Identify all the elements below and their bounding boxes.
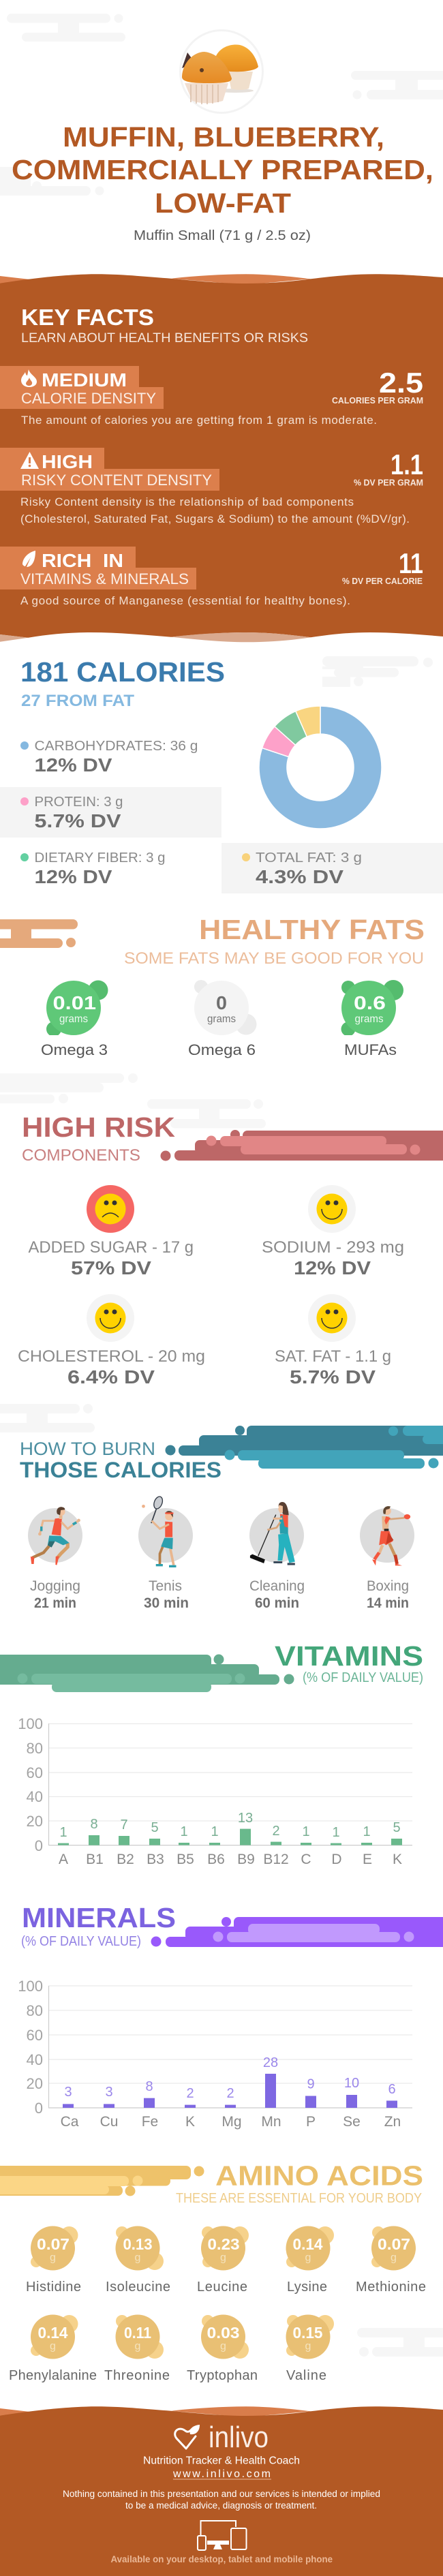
bar chart: vitamins: 0 (35, 1837, 43, 1854)
amino: valine: g (305, 2340, 311, 2352)
bar chart: vitamins: A (59, 1852, 68, 1867)
bar chart: minerals: 40 (27, 2051, 43, 2068)
icon: devices (198, 2521, 247, 2550)
amino: threonine: Threonine (104, 2368, 170, 2383)
risk item: sodium (262, 1185, 404, 1278)
amino: methionine: 0.07 (378, 2235, 410, 2253)
icon: tennis player (142, 1495, 176, 1567)
banner: healthy fats (0, 919, 78, 948)
exercise: tennis (138, 1495, 193, 1611)
bar chart: minerals: Mn (261, 2114, 281, 2130)
amino: methionine: Methionine (356, 2280, 426, 2295)
bar chart: vitamins: 5 (393, 1820, 401, 1835)
heading: minerals (21, 1902, 176, 1949)
risk item: saturated fat: 5.7% DV (290, 1366, 376, 1387)
bar chart: vitamins: B6 (207, 1852, 225, 1867)
stat: omega 3 (41, 980, 108, 1058)
amino: leucine: g (220, 2252, 226, 2264)
fact: risky content density: % DV PER GRAM (354, 477, 423, 488)
panel: key facts (0, 274, 443, 642)
fact: rich in vitamins and minerals: % DV PER CALORIE (342, 576, 423, 586)
bar chart: minerals: 10 (344, 2076, 359, 2091)
amino: phenylalanine: g (50, 2340, 56, 2352)
amino: leucine: 0.23 (207, 2235, 240, 2253)
fact: rich in vitamins and minerals: A good source of Manganese (essential for healthy bones). (20, 594, 350, 607)
fact: calorie density: CALORIE DENSITY (21, 390, 156, 407)
bar chart: vitamins: E (363, 1852, 372, 1867)
amino: isoleucine: 0.13 (123, 2235, 153, 2253)
bar chart: minerals: 20 (27, 2075, 43, 2092)
logo: inlivo (175, 2421, 269, 2454)
bar chart: vitamins: 100 (18, 1715, 43, 1732)
bar chart: minerals: Se (343, 2114, 361, 2130)
risk item: saturated fat: SAT. FAT - 1.1 g (275, 1347, 391, 1366)
amino: lysine: g (305, 2252, 311, 2264)
fact: calorie density: MEDIUM (42, 369, 127, 390)
amino: tryptophan: g (220, 2340, 226, 2352)
availability note: Available on your desktop, tablet and mobile phone (110, 2554, 333, 2564)
amino: leucine: Leucine (197, 2280, 247, 2295)
bar chart: minerals: 28 (263, 2055, 278, 2070)
legend: total fat: TOTAL FAT: 3 g (256, 850, 362, 865)
amino: histidine: 0.07 (37, 2235, 70, 2253)
stat: MUFAs: MUFAs (344, 1041, 397, 1058)
legend: protein: 5.7% DV (34, 810, 121, 831)
amino: threonine: 0.11 (124, 2324, 151, 2342)
legend: protein (0, 787, 222, 838)
heading: amino acids (176, 2160, 423, 2206)
fact: rich in vitamins and minerals: RICH IN (42, 550, 123, 571)
stat: omega 3: grams (59, 1013, 88, 1025)
exercise: boxing: 14 min (367, 1595, 409, 1611)
heading: high risk: HIGH RISK (22, 1111, 175, 1143)
banner: minerals (151, 1917, 443, 1947)
icon: warning triangle (20, 452, 39, 469)
bar chart: vitamins: 20 (27, 1813, 43, 1830)
amino: histidine (26, 2226, 81, 2295)
subheading: calories from fat: 27 FROM FAT (21, 692, 134, 710)
bar chart: minerals: 60 (27, 2027, 43, 2044)
amino: lysine: Lysine (287, 2280, 327, 2295)
bar chart: vitamins: 1 (59, 1825, 67, 1840)
amino: phenylalanine (9, 2314, 97, 2383)
amino: histidine: g (50, 2252, 56, 2264)
subheading: components: COMPONENTS (22, 1146, 140, 1165)
fact: rich in vitamins and minerals: VITAMINS & MINERALS (20, 570, 189, 587)
legend: carbohydrates: CARBOHYDRATES: 36 g (34, 739, 198, 754)
amino: tryptophan: 0.03 (207, 2324, 240, 2342)
exercise: tennis: 30 min (144, 1595, 189, 1611)
risk item: added sugar: 57% DV (71, 1257, 151, 1278)
bar chart: vitamins: K (393, 1852, 402, 1867)
bar chart: vitamins: 1 (211, 1824, 219, 1839)
amino: valine (286, 2314, 334, 2383)
heading: key facts: KEY FACTS (21, 305, 154, 330)
bar chart: vitamins: 1 (332, 1825, 340, 1840)
legend: carbohydrates (20, 739, 198, 776)
exercise: cleaning: 60 min (255, 1595, 299, 1611)
amino: isoleucine (106, 2226, 170, 2295)
bar chart: vitamins: 8 (90, 1817, 98, 1832)
exercise: boxing (360, 1506, 414, 1611)
amino: valine: Valine (286, 2368, 326, 2383)
risk item: added sugar: ADDED SUGAR - 17 g (29, 1238, 194, 1257)
heading: how to burn those calories: THOSE CALORIES (20, 1458, 222, 1482)
amino: tryptophan: Tryptophan (187, 2368, 258, 2383)
website link: www.inlivo.com (172, 2468, 271, 2480)
banner: vitamins (0, 1655, 294, 1692)
banner: high risk (161, 1130, 443, 1161)
disclaimer (63, 2489, 380, 2511)
logo: inlivo: inlivo (209, 2421, 269, 2454)
stat: MUFAs: 0.6 (354, 992, 386, 1013)
serving size subtitle: Muffin Small (71 g / 2.5 oz) (134, 228, 311, 243)
exercise: boxing: Boxing (367, 1578, 409, 1594)
fact: rich in vitamins and minerals: 11 (399, 547, 423, 579)
stat: omega 6: 0 (216, 992, 227, 1013)
fact: calorie density (0, 366, 423, 427)
subheading: (% OF DAILY VALUE) (21, 1934, 141, 1949)
bar chart: vitamins: 1 (180, 1824, 188, 1839)
bar chart: vitamins: 60 (27, 1764, 43, 1781)
donut chart: macronutrients (259, 706, 382, 829)
heading: minerals: MINERALS (22, 1902, 176, 1933)
fact: calorie density: 2.5 (379, 367, 423, 399)
bar chart: minerals (18, 1978, 412, 2130)
fact: rich in vitamins and minerals (0, 547, 423, 607)
legend: dietary fiber: 12% DV (34, 866, 112, 887)
bar chart: minerals: 9 (307, 2077, 315, 2092)
bar chart: vitamins: B5 (177, 1852, 194, 1867)
subheading: SOME FATS MAY BE GOOD FOR YOU (124, 949, 424, 968)
panel: footer (0, 2406, 443, 2576)
legend: total fat: 4.3% DV (256, 866, 343, 887)
bar chart: vitamins: 80 (27, 1740, 43, 1757)
bar chart: vitamins: B12 (263, 1852, 289, 1867)
heading: healthy fats (124, 914, 425, 968)
amino: threonine: g (135, 2340, 140, 2352)
bar chart: minerals: 100 (18, 1978, 43, 1995)
fact: risky content density: Risky Content density is the relationship of bad components (20, 495, 354, 508)
bar chart: vitamins: 13 (238, 1811, 253, 1826)
bar chart: vitamins: 7 (120, 1818, 128, 1833)
banner: amino acids (0, 2166, 204, 2196)
icon: boxer (372, 1506, 410, 1565)
bar chart: minerals: 3 (64, 2085, 72, 2100)
exercise: jogging (28, 1507, 82, 1611)
bar chart: vitamins: B1 (86, 1852, 104, 1867)
legend: total fat (222, 843, 443, 893)
banner: burn calories (165, 1426, 443, 1469)
risk item: sodium: 12% DV (294, 1257, 371, 1278)
fact: calorie density: CALORIES PER GRAM (332, 395, 423, 405)
heading: calories: 181 CALORIES (20, 656, 225, 688)
fact: risky content density: RISKY CONTENT DENSITY (21, 472, 212, 489)
heading: how to burn those calories: HOW TO BURN (20, 1439, 155, 1459)
risk item: added sugar (29, 1185, 194, 1278)
icon: muffins photo (180, 30, 263, 113)
bar chart: minerals: Ca (61, 2114, 79, 2130)
risk item: cholesterol: CHOLESTEROL - 20 mg (18, 1347, 205, 1366)
bar chart: minerals: 0 (35, 2100, 43, 2117)
heading: calories (20, 656, 225, 710)
title: LOW-FAT (155, 187, 291, 219)
bar chart: vitamins: B3 (147, 1852, 164, 1867)
fact: risky content density (0, 448, 423, 525)
bar chart: vitamins: C (301, 1852, 311, 1867)
stat: omega 3: Omega 3 (41, 1041, 108, 1058)
heading: healthy fats: HEALTHY FATS (199, 914, 425, 945)
bar chart: vitamins (18, 1715, 412, 1867)
bar chart: vitamins: 1 (302, 1824, 310, 1839)
title: COMMERCIALLY PREPARED, (12, 154, 433, 185)
risk item: sodium: SODIUM - 293 mg (262, 1238, 404, 1257)
amino: leucine (197, 2226, 249, 2295)
amino: histidine: Histidine (26, 2280, 81, 2295)
bar chart: minerals: 6 (388, 2082, 396, 2097)
stat: omega 6: Omega 6 (188, 1041, 256, 1058)
stat: omega 6: grams (207, 1013, 236, 1025)
heading: how to burn those calories (20, 1439, 222, 1482)
bar chart: vitamins: 1 (363, 1824, 371, 1839)
legend: dietary fiber (20, 850, 165, 887)
amino: phenylalanine: Phenylalanine (9, 2368, 97, 2383)
risk item: saturated fat (275, 1294, 391, 1387)
bar chart: minerals: 2 (186, 2086, 194, 2101)
amino: isoleucine: g (135, 2252, 140, 2264)
amino: isoleucine: Isoleucine (106, 2280, 170, 2295)
amino: phenylalanine: 0.14 (38, 2324, 68, 2342)
bar chart: minerals: Fe (142, 2114, 158, 2130)
bar chart: vitamins: 2 (272, 1824, 280, 1839)
stat: omega 3: 0.01 (53, 992, 96, 1013)
legend: protein: PROTEIN: 3 g (34, 795, 123, 810)
amino: lysine (286, 2226, 334, 2295)
bar chart: minerals: 80 (27, 2002, 43, 2019)
heading: vitamins (275, 1640, 423, 1685)
bar chart: vitamins: D (331, 1852, 342, 1867)
exercise: jogging: 21 min (34, 1595, 76, 1611)
bar chart: minerals: 3 (105, 2085, 113, 2100)
tagline: Nutrition Tracker & Health Coach (143, 2455, 300, 2467)
bar chart: vitamins: B2 (117, 1852, 134, 1867)
exercise: cleaning (249, 1502, 305, 1611)
amino: lysine: 0.14 (293, 2235, 323, 2253)
icon: leaf (22, 551, 35, 567)
subheading: (% OF DAILY VALUE) (303, 1670, 423, 1685)
risk item: cholesterol (18, 1294, 205, 1387)
bar chart: minerals: P (306, 2114, 316, 2130)
stat: omega 6 (188, 980, 256, 1058)
icon: woman sweeping (250, 1502, 295, 1565)
subheading: LEARN ABOUT HEALTH BENEFITS OR RISKS (21, 331, 308, 346)
legend: carbohydrates: 12% DV (34, 754, 112, 776)
amino: threonine (104, 2314, 170, 2383)
fact: risky content density: 1.1 (391, 448, 423, 480)
disclaimer: Nothing contained in this presentation and our services is intended or implied (63, 2489, 380, 2499)
icon: runner (31, 1507, 80, 1565)
icon: flame (21, 369, 37, 387)
fact: risky content density: (Cholesterol, Saturated Fat, Sugars & Sodium) to the amount (%DV/gr). (20, 512, 410, 525)
amino: methionine (356, 2226, 426, 2295)
exercise: cleaning: Cleaning (249, 1578, 305, 1594)
title (12, 121, 433, 219)
title: MUFFIN, BLUEBERRY, (63, 121, 384, 153)
bar chart: minerals: 2 (226, 2086, 234, 2101)
heading: vitamins: VITAMINS (275, 1640, 423, 1672)
legend: dietary fiber: DIETARY FIBER: 3 g (34, 850, 165, 865)
bar chart: minerals: Mg (222, 2114, 242, 2130)
bar chart: minerals: K (185, 2114, 195, 2130)
amino: valine: 0.15 (293, 2324, 323, 2342)
fact: risky content density: HIGH (42, 451, 93, 472)
bar chart: vitamins: B9 (237, 1852, 255, 1867)
bar chart: vitamins: 5 (151, 1820, 159, 1835)
bar chart: minerals: 8 (145, 2079, 153, 2094)
amino: tryptophan (187, 2314, 258, 2383)
fact: calorie density: The amount of calories you are getting from 1 gram is moderate. (21, 414, 377, 427)
bar chart: minerals: Cu (100, 2114, 118, 2130)
stat: MUFAs: grams (354, 1013, 383, 1025)
exercise: tennis: Tenis (149, 1578, 182, 1594)
heading: high risk (22, 1111, 175, 1165)
bar chart: vitamins: 40 (27, 1788, 43, 1805)
stat: MUFAs (341, 980, 403, 1058)
bar chart: minerals: Zn (384, 2114, 401, 2130)
risk item: cholesterol: 6.4% DV (67, 1366, 155, 1387)
heading: amino acids: AMINO ACIDS (215, 2160, 423, 2192)
exercise: jogging: Jogging (30, 1578, 80, 1594)
amino: methionine: g (391, 2252, 397, 2264)
disclaimer: to be a medical advice, diagnosis or treatment. (125, 2500, 317, 2511)
